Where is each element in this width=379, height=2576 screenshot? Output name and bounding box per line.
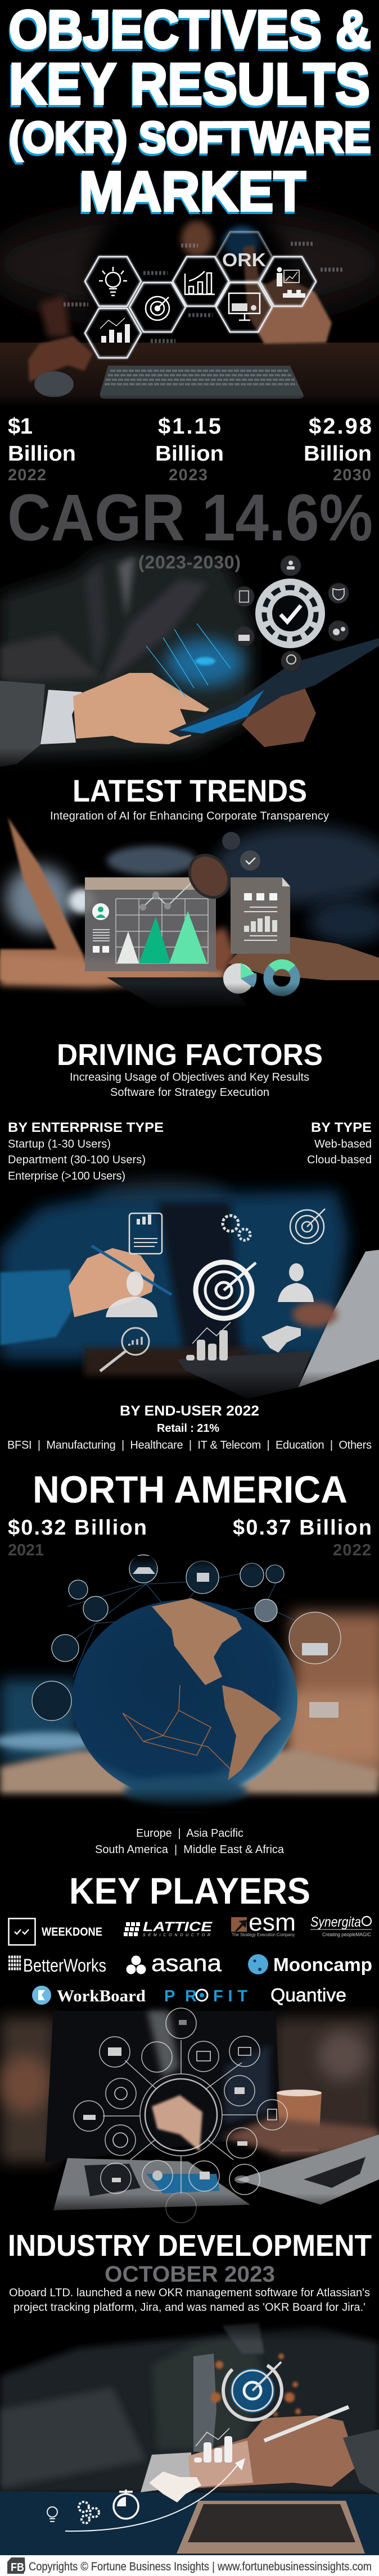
icon: person left — [106, 1271, 157, 1317]
heading: driving factors: DRIVING FACTORS — [57, 1038, 323, 1072]
network bubbles — [32, 1555, 342, 1726]
pen — [264, 2407, 349, 2441]
logo: Lattice Semiconductor: LATTICE — [143, 1919, 213, 1935]
icon: stopwatch — [114, 2489, 138, 2519]
logo: Profit: FIT — [213, 1987, 247, 2005]
panel: trends photo with dashboard — [0, 817, 379, 1010]
footer logo — [7, 2557, 25, 2574]
icon: target — [146, 297, 169, 320]
heading: latest trends: LATEST TRENDS — [73, 773, 307, 808]
panel: network hub photo — [0, 2008, 379, 2223]
other regions: South America | Middle East & Africa — [95, 1844, 285, 1856]
heading: key players: KEY PLAYERS — [69, 1870, 310, 1911]
logo: Lattice Semiconductor: SEMICONDUCTOR — [143, 1933, 210, 1937]
icon: presenter with team — [277, 267, 305, 298]
panel: by enterprise type — [8, 1120, 164, 1182]
logo: Profit: PR — [164, 1987, 197, 2005]
logo: Weekdone: WEEKDONE — [42, 1926, 102, 1938]
keyboard — [100, 366, 304, 399]
chart grid — [116, 899, 208, 963]
stat 2023: Billion — [155, 442, 224, 466]
hub glyphs — [83, 2020, 277, 2183]
wrist and hand — [188, 2415, 358, 2488]
stat 2022: Billion — [8, 442, 76, 466]
stat: 2021: 2021 — [8, 1541, 44, 1559]
avatar — [92, 903, 109, 920]
panel: by end-user: BY END-USER 2022 — [120, 1403, 259, 1419]
logo: Quantive: Quantive — [270, 1985, 346, 2005]
other regions: Europe | Asia Pacific — [136, 1827, 243, 1840]
logo: Synergita: Synergita — [310, 1914, 361, 1930]
panel: by enterprise type: Enterprise (>100 Users) — [8, 1170, 125, 1182]
south america landmass — [222, 1685, 281, 1781]
icon: magnifier — [100, 1328, 149, 1371]
network lines — [65, 1567, 315, 1677]
logo: Asana — [126, 1950, 222, 1976]
pie chart — [223, 963, 256, 994]
growth arrow — [65, 2458, 245, 2531]
development description — [9, 2287, 370, 2314]
decorative dashed marks — [64, 244, 343, 341]
hub satellite circles — [74, 2008, 287, 2223]
panel: by type — [307, 1120, 372, 1166]
subheading: driving factors: Software for Strategy Execution — [110, 1086, 269, 1099]
title white — [9, 0, 371, 223]
tie — [193, 2354, 216, 2452]
stat 2023 — [155, 414, 224, 484]
table — [0, 2491, 379, 2555]
north america landmass — [152, 1598, 242, 1685]
donut chart — [268, 964, 295, 991]
panel: by type: Cloud-based — [307, 1154, 372, 1166]
logo: BetterWorks: BetterWorks — [23, 1955, 106, 1976]
hand with pen — [69, 1246, 172, 1317]
laptop screen edge — [0, 817, 84, 980]
development date: OCTOBER 2023 — [105, 2262, 275, 2287]
icon: monitor — [229, 293, 260, 320]
logo: Weekdone — [9, 1919, 102, 1945]
glow — [69, 889, 96, 913]
subheading: driving factors — [70, 1071, 309, 1099]
icon: handshake — [261, 1326, 301, 1353]
suit — [45, 2011, 281, 2163]
stat 2022 — [8, 414, 76, 484]
stat: 2021: $0.32 Billion — [8, 1516, 147, 1540]
icon: gears — [223, 1216, 250, 1240]
report document — [231, 877, 290, 954]
tablet — [169, 638, 379, 737]
hexagons — [85, 232, 316, 358]
panel: market size statistics — [7, 414, 373, 572]
CAGR period: (2023-2030) — [138, 552, 241, 572]
hand on hub — [152, 2095, 202, 2151]
stat 2023: 2023 — [169, 466, 207, 484]
panel: by type: BY TYPE — [311, 1120, 372, 1135]
stat 2030: 2030 — [333, 466, 371, 484]
panel: strategy photo with icons — [0, 1180, 379, 1405]
panel: by end-user: BFSI | Manufacturing | Healthcare | IT & Telecom | Education | Others — [7, 1439, 372, 1451]
stat: 2022 — [233, 1516, 372, 1559]
shirt cuff — [40, 690, 82, 744]
small status bubbles — [222, 832, 260, 871]
orbit icons — [234, 556, 349, 671]
title white: MARKET — [79, 160, 306, 223]
icon: clipboard — [129, 1213, 162, 1254]
panel: by type: Web-based — [314, 1138, 372, 1150]
laptop — [177, 1250, 379, 1399]
title — [8, 0, 371, 225]
laptop — [236, 2134, 379, 2205]
subheading: latest trends: Integration of AI for Enhancing Corporate Transparency — [50, 810, 329, 822]
panel: by end-user: Retail : 21% — [157, 1422, 219, 1435]
heading: north america: NORTH AMERICA — [33, 1468, 348, 1511]
panel: by enterprise type: BY ENTERPRISE TYPE — [8, 1120, 164, 1135]
logo: Mooncamp: Mooncamp — [273, 1954, 372, 1975]
ORK label: ORK — [222, 249, 266, 270]
globe sphere — [73, 1598, 297, 1808]
stat 2030: $2.98 — [309, 414, 372, 439]
development description: Oboard LTD. launched a new OKR management software for Atlassian's — [9, 2287, 370, 2299]
icon: bars and trend line — [100, 318, 130, 343]
icon: big target — [196, 1262, 256, 1318]
logo: Asana: asana — [151, 1950, 222, 1976]
stat: 2021 — [8, 1516, 147, 1559]
other regions — [95, 1827, 285, 1856]
footer bar — [0, 2555, 379, 2576]
panel: hero photo with hexagon icons — [0, 185, 379, 409]
icon: bar chart with arrow — [185, 271, 215, 294]
stat 2022: $1 — [8, 414, 33, 439]
icon: small target — [290, 1209, 325, 1244]
icon: target — [213, 2351, 292, 2431]
right sleeve — [343, 2429, 379, 2494]
panel: key player logos — [8, 1909, 372, 2005]
shirt cuff — [141, 2452, 192, 2492]
panel: businessman with tablet photo — [0, 548, 379, 775]
logo: ESM — [231, 1909, 296, 1937]
icon: bars with trend line — [194, 2428, 232, 2463]
holding hand — [242, 685, 316, 747]
logo: Synergita — [310, 1914, 372, 1937]
icon: gears — [79, 2502, 99, 2523]
panel: by enterprise type: Startup (1-30 Users) — [8, 1138, 111, 1150]
logo: Lattice Semiconductor — [124, 1919, 213, 1937]
icon: bars with trend — [186, 1322, 231, 1360]
gauge circle — [255, 579, 325, 648]
logo: WorkBoard: WorkBoard — [57, 1987, 146, 2005]
stat 2022: 2022 — [8, 466, 46, 484]
sleeve — [0, 681, 45, 767]
stat 2030: Billion — [304, 442, 372, 466]
stat: 2022: 2022 — [333, 1541, 371, 1559]
logo: ESM: The Strategy Execution Company — [232, 1932, 295, 1937]
stat 2023: $1.15 — [158, 414, 221, 439]
title shadow — [8, 2, 371, 225]
dashboard window — [85, 872, 216, 971]
hand on keyboard — [228, 937, 379, 980]
stat 2030 — [304, 414, 372, 484]
subheading: driving factors: Increasing Usage of Objectives and Key Results — [70, 1071, 309, 1084]
collar — [222, 2323, 264, 2354]
panel: by end-user — [7, 1403, 372, 1451]
documents on desk — [53, 2158, 250, 2210]
logo: ESM: esm — [249, 1909, 296, 1936]
panel: by enterprise type: Department (30-100 Users) — [8, 1154, 146, 1166]
icon: mouse — [34, 371, 74, 397]
icon: light bulb — [47, 2507, 57, 2522]
icon: person right — [278, 1263, 314, 1302]
panel: development photo — [0, 2314, 379, 2555]
stat: 2022: $0.37 Billion — [233, 1516, 372, 1540]
tablet — [177, 2501, 365, 2554]
bubble glyphs — [133, 1567, 339, 1718]
logo: Synergita: Creating peopleMAGIC — [322, 1932, 371, 1937]
icon: light bulb — [99, 267, 127, 295]
icon: handshake — [149, 2472, 201, 2502]
coffee cup — [277, 2092, 322, 2151]
hub rings — [103, 2040, 256, 2193]
footer logo: FB — [11, 2561, 24, 2574]
blue digital glow — [146, 623, 245, 697]
title shadow: MARKET — [78, 162, 306, 225]
logo: Profit — [164, 1987, 247, 2005]
panel: globe photo — [0, 1555, 379, 1812]
pointing hand — [73, 673, 209, 744]
development description: project tracking platform, Jira, and was named as 'OKR Board for Jira.' — [13, 2301, 366, 2314]
orange particles — [211, 2354, 301, 2416]
orange network mesh — [123, 1685, 231, 1769]
desk — [84, 1348, 259, 1376]
magnifier — [182, 848, 237, 905]
